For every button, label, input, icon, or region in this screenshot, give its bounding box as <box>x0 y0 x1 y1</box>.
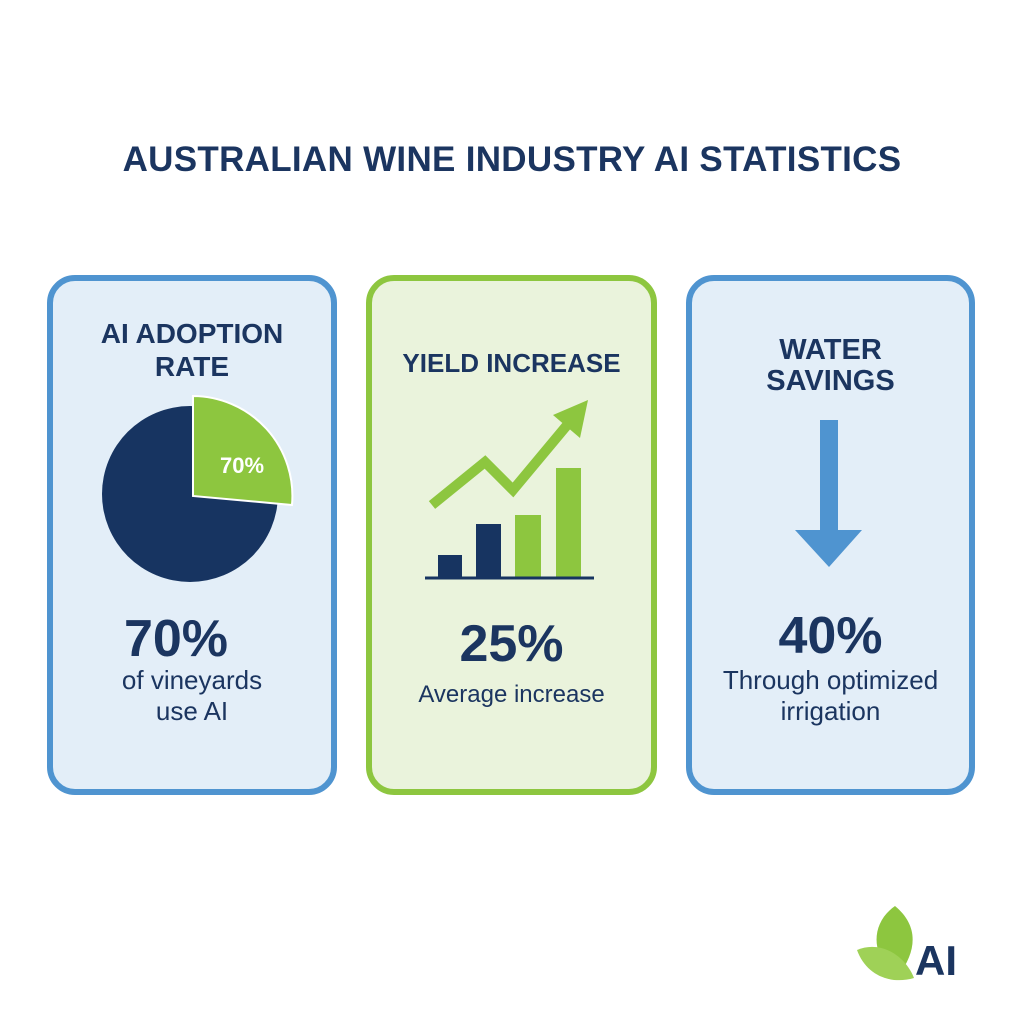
icon: down arrow <box>795 420 862 567</box>
panel: water savings <box>686 275 975 795</box>
stat: 25%: 25% <box>459 615 564 673</box>
heading <box>766 334 895 397</box>
bar chart with trend arrow <box>425 400 594 580</box>
logo: leaf AI: AI <box>915 937 957 984</box>
logo: leaf AI <box>857 906 957 984</box>
heading: AI adoption rate <box>101 318 283 382</box>
caption: Average increase <box>418 681 605 708</box>
panel: yield increase <box>366 275 657 795</box>
heading: AI adoption rate: AI ADOPTION <box>101 318 283 349</box>
heading: YIELD INCREASE <box>402 348 621 378</box>
caption: irrigation <box>781 696 880 726</box>
caption: of vineyards <box>122 665 262 695</box>
caption <box>122 665 262 726</box>
panel: AI adoption rate <box>47 275 337 795</box>
title: AUSTRALIAN WINE INDUSTRY AI STATISTICS <box>123 140 901 179</box>
pie chart: 70% <box>220 453 264 478</box>
heading: WATER <box>779 334 882 366</box>
heading: SAVINGS <box>766 365 895 397</box>
caption: Through optimized <box>723 665 938 695</box>
stat: 70%: 70% <box>124 610 228 668</box>
stat: 40%: 40% <box>778 607 883 665</box>
pie chart <box>102 395 294 582</box>
heading: AI adoption rate: RATE <box>155 351 229 382</box>
caption <box>723 665 938 726</box>
caption: use AI <box>156 696 228 726</box>
